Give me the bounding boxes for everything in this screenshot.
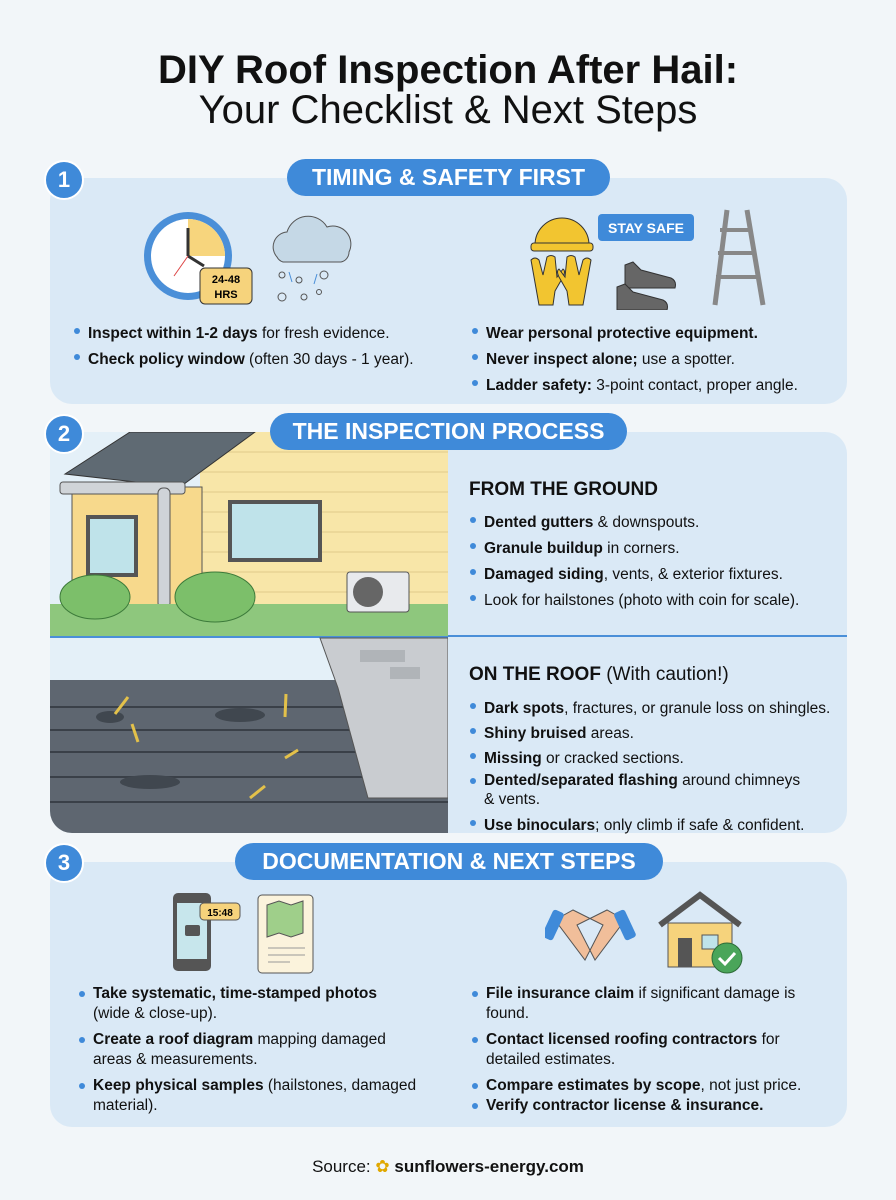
text: safety bullets: Ladder safety: 3-point contact, proper angle.	[486, 377, 798, 394]
text: roof bullets: & vents.	[484, 791, 540, 808]
panel: documentation	[50, 862, 847, 1127]
number 3: 3	[58, 850, 70, 875]
icon: hail cloud	[272, 216, 352, 302]
text: next steps bullets: detailed estimates.	[486, 1051, 615, 1068]
text: documentation bullets: material).	[93, 1097, 158, 1114]
heading: inspection process	[270, 413, 627, 450]
text: roof bullets	[470, 700, 830, 834]
icon: clock: 24-48	[212, 274, 240, 286]
number 1	[44, 160, 84, 200]
number 3	[44, 843, 84, 883]
text: next steps bullets	[472, 985, 801, 1114]
text: next steps bullets: Compare estimates by scope, not just price.	[486, 1077, 801, 1094]
icon: phone and notebook	[173, 893, 314, 974]
heading: inspection process: THE INSPECTION PROCESS	[293, 418, 604, 444]
text: documentation bullets: (wide & close-up).	[93, 1005, 217, 1022]
text: next steps bullets: File insurance claim if significant damage is	[486, 985, 795, 1002]
title: Your Checklist & Next Steps	[199, 88, 697, 132]
number 2	[44, 414, 84, 454]
divider line	[448, 635, 848, 637]
text: roof bullets: Shiny bruised areas.	[484, 725, 634, 742]
text: documentation bullets: Create a roof diagram mapping damaged	[93, 1031, 386, 1048]
text: roof bullets: Dark spots, fractures, or granule loss on shingles.	[484, 700, 830, 717]
heading: documentation & next steps	[235, 843, 663, 880]
text: timing bullets	[74, 325, 414, 368]
text: next steps bullets: found.	[486, 1005, 529, 1022]
text: ground bullets: Look for hailstones (photo with coin for scale).	[484, 592, 799, 609]
text: safety bullets: Wear personal protective equipment.	[486, 325, 758, 342]
icon: clock: HRS	[214, 289, 238, 301]
icon: clock	[144, 212, 252, 304]
text: documentation bullets	[79, 985, 416, 1114]
panel: inspection process	[50, 432, 847, 833]
heading: timing & safety first	[287, 159, 610, 196]
text: timing bullets: Check policy window (often 30 days - 1 year).	[88, 351, 414, 368]
text: timing bullets: Inspect within 1-2 days for fresh evidence.	[88, 325, 390, 342]
text: ground bullets	[470, 514, 799, 609]
icon: handshake and house	[545, 891, 742, 974]
number 1: 1	[58, 167, 70, 192]
illustration: house and roof	[50, 432, 448, 833]
text: ground bullets: Dented gutters & downspouts.	[484, 514, 699, 531]
panel: timing & safety	[50, 178, 847, 404]
heading: documentation & next steps: DOCUMENTATION & NEXT STEPS	[262, 848, 636, 874]
text: ground bullets: Granule buildup in corners.	[484, 540, 680, 557]
text: ground bullets: Damaged siding, vents, & exterior fixtures.	[484, 566, 783, 583]
title	[158, 48, 738, 132]
text: documentation bullets: Keep physical samples (hailstones, damaged	[93, 1077, 416, 1094]
number 2: 2	[58, 421, 70, 446]
footer: source: Source: ✿ sunflowers-energy.com	[312, 1157, 584, 1176]
text: next steps bullets: Contact licensed roofing contractors for	[486, 1031, 780, 1048]
icon: safety gear	[530, 210, 766, 310]
icon: safety gear: STAY SAFE	[608, 220, 684, 236]
heading: on the roof: ON THE ROOF (With caution!)	[469, 664, 729, 685]
heading: timing & safety first: TIMING & SAFETY FIRST	[312, 164, 585, 190]
text: roof bullets: Use binoculars; only climb if safe & confident.	[484, 817, 804, 834]
text: roof bullets: Dented/separated flashing around chimneys	[484, 772, 800, 789]
text: documentation bullets: Take systematic, time-stamped photos	[93, 985, 377, 1002]
title: DIY Roof Inspection After Hail:	[158, 48, 738, 92]
text: safety bullets: Never inspect alone; use a spotter.	[486, 351, 735, 368]
text: next steps bullets: Verify contractor license & insurance.	[486, 1097, 763, 1114]
icon: phone and notebook: 15:48	[207, 908, 233, 919]
heading: from the ground: FROM THE GROUND	[469, 479, 658, 500]
text: roof bullets: Missing or cracked sections.	[484, 750, 684, 767]
text: safety bullets	[472, 325, 798, 394]
text: documentation bullets: areas & measurements.	[93, 1051, 258, 1068]
